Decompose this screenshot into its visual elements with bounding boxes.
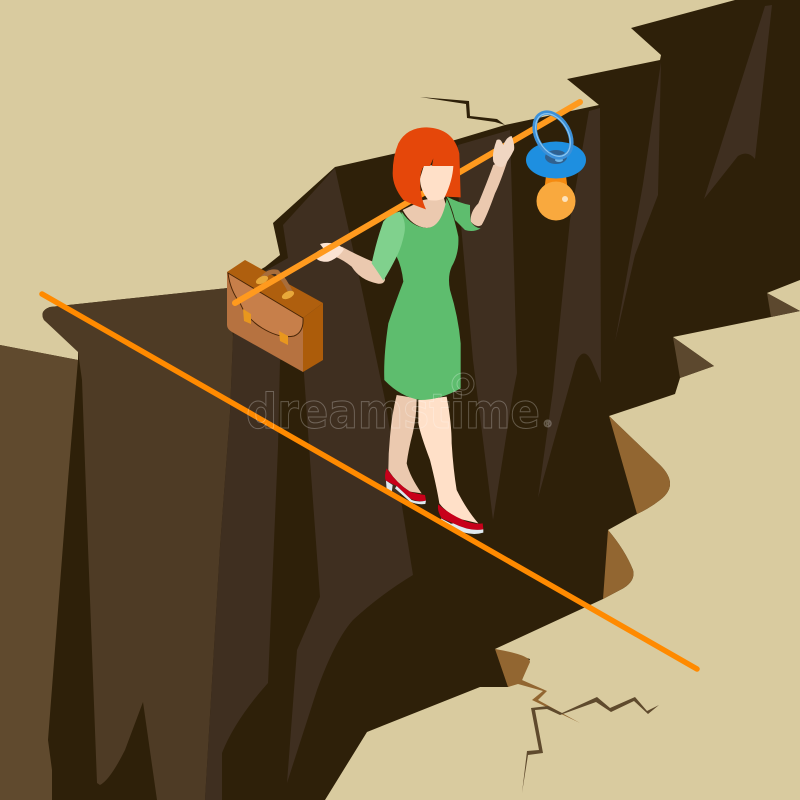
pacifier bbox=[526, 142, 586, 220]
neck and chest bbox=[403, 196, 447, 228]
stalactite: top right bbox=[704, 5, 772, 199]
right sleeve bbox=[447, 197, 481, 231]
hair bbox=[393, 127, 461, 209]
front leg bbox=[418, 397, 478, 523]
briefcase bbox=[227, 260, 323, 372]
face bbox=[420, 165, 454, 201]
back leg bbox=[388, 395, 422, 493]
front shoe bbox=[438, 504, 483, 534]
balancing pole bbox=[235, 102, 580, 303]
woman: upper body bbox=[314, 158, 508, 400]
right arm bbox=[471, 158, 508, 226]
watermark spiral bbox=[452, 373, 474, 395]
briefcase clasps bbox=[243, 309, 288, 345]
briefcase front face bbox=[227, 272, 303, 372]
cliff face: far left bbox=[0, 345, 78, 800]
pacifier ring bbox=[527, 106, 579, 164]
pacifier shield bbox=[526, 142, 586, 178]
watermark text: dreamstime bbox=[246, 384, 540, 440]
cliff wedge: bottom bbox=[495, 649, 580, 723]
left arm bbox=[335, 247, 385, 284]
briefcase handle bbox=[255, 272, 295, 301]
cliff wedge: far right bbox=[767, 293, 800, 317]
pacifier bulb bbox=[536, 182, 576, 220]
pacifier knob bbox=[545, 150, 567, 164]
woman: head and right hand bbox=[393, 127, 514, 209]
left sleeve bbox=[372, 212, 405, 281]
crack: bottom bbox=[522, 697, 659, 793]
pacifier neck bbox=[544, 176, 568, 192]
pacifier bulb highlight bbox=[562, 196, 568, 202]
woman: lower body bbox=[385, 395, 483, 534]
watermark bbox=[246, 373, 552, 440]
stalactite: below pacifier bbox=[538, 108, 601, 498]
cliff face: left block bbox=[42, 288, 233, 800]
dress bbox=[384, 198, 461, 400]
briefcase flap bbox=[228, 273, 303, 337]
watermark registered mark: ® bbox=[544, 419, 552, 430]
crack: top bbox=[420, 97, 505, 125]
stalactite: narrow bbox=[615, 62, 661, 342]
left hand bbox=[314, 243, 344, 262]
tightrope bbox=[42, 294, 697, 669]
stalactite: behind woman right bbox=[455, 130, 517, 520]
cliff face: central column bbox=[205, 168, 413, 800]
cliff wedge: lower right bbox=[603, 530, 633, 599]
right hand bbox=[493, 136, 514, 167]
briefcase side face bbox=[303, 303, 323, 372]
briefcase top face bbox=[227, 260, 323, 318]
cliff wedge: middle right bbox=[609, 416, 670, 514]
cliff wedge: right bbox=[673, 337, 714, 378]
back shoe bbox=[385, 468, 426, 504]
